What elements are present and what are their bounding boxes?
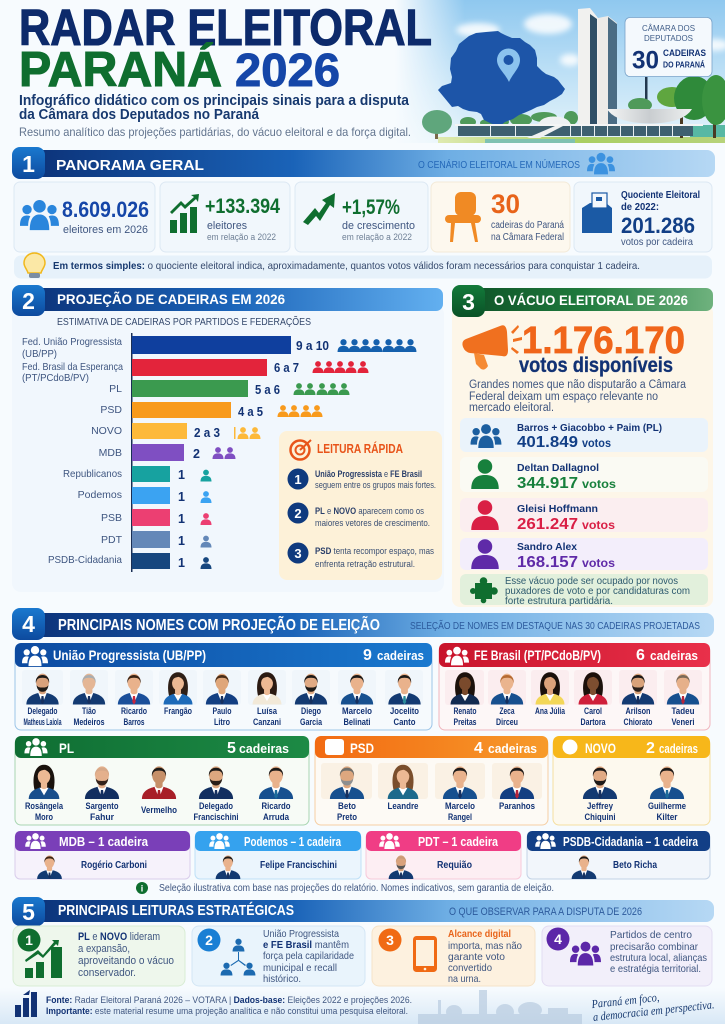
title: PARANÁ	[19, 43, 222, 97]
card: alcance digital: Alcance digital	[448, 928, 511, 940]
card: 30 cadeiras	[431, 182, 570, 252]
item 3	[288, 542, 434, 570]
section 1 heading: Panorama Geral: 1	[22, 151, 35, 177]
callout: Câmara dos Deputados: CADEIRAS	[663, 48, 706, 58]
portrait: Frangão	[164, 672, 192, 717]
row: Gleisi Hoffmann: Gleisi Hoffmann	[517, 503, 598, 515]
portrait: Beto Preto: Beto	[338, 801, 356, 812]
portrait: Ricardo Barros: Ricardo	[121, 706, 147, 717]
bar values	[178, 339, 329, 570]
card: percentual de crescimento	[295, 182, 428, 252]
bar values: 1	[178, 534, 185, 548]
portrait: Carol Dartora: Carol	[584, 706, 602, 717]
portrait: Zeca Dirceu: Dirceu	[496, 717, 518, 728]
portrait: Marcelo Rangel: Marcelo	[445, 801, 475, 812]
portrait: Jeffrey Chiquini: Jeffrey	[587, 801, 614, 812]
card: crescimento de eleitores: em relação a 2022	[207, 232, 276, 242]
bars	[132, 336, 291, 569]
portrait: Frangão: Frangão	[164, 706, 192, 717]
portrait: Delegado Matheus Laiola: Delegado	[28, 706, 58, 717]
portrait: Ricardo Barros	[118, 674, 150, 728]
portrait: Jocelito Canto: Jocelito	[390, 706, 419, 717]
bar values: 2 a 3	[194, 426, 220, 440]
portrait: Paranhos: Paranhos	[499, 801, 535, 812]
icon: torres do congresso	[578, 8, 617, 125]
icon: plenário	[607, 109, 692, 124]
card: União Progressista e FE Brasil	[192, 926, 365, 986]
panel: NOVO: NOVO	[585, 740, 616, 756]
section 1 heading: Panorama Geral: O CENÁRIO ELEITORAL EM NÚMEROS	[418, 158, 580, 171]
title: RADAR ELEITORAL	[19, 0, 432, 56]
card: alcance digital: garante voto	[448, 951, 505, 963]
card: quociente eleitoral: de 2022:	[621, 202, 659, 213]
section 3 heading: 3	[462, 289, 475, 315]
row: Barros + Giacobbo + Paim: votos	[582, 436, 611, 450]
panel: MDB	[15, 831, 190, 879]
portrait: Renato Preitas: Renato	[454, 706, 477, 717]
bar values: 4 a 5	[238, 405, 263, 419]
panel: PDT: PDT – 1 cadeira	[418, 834, 499, 849]
icon: mapa do Paraná	[438, 31, 565, 126]
bar labels: Fed. Brasil da Esperança	[22, 361, 123, 373]
panel: Podemos: Podemos – 1 cadeira	[244, 834, 342, 849]
portrait: Tião Medeiros: Medeiros	[74, 717, 104, 728]
card: crescimento de eleitores	[160, 182, 290, 252]
card: quociente eleitoral: Quociente Eleitoral	[621, 190, 700, 201]
callout: Câmara dos Deputados: DEPUTADOS	[644, 33, 693, 43]
skyline	[418, 990, 582, 1024]
bar values: 1	[178, 490, 185, 504]
section 1 heading: Panorama Geral: PANORAMA GERAL	[56, 157, 204, 174]
panel: PSDB-Cidadania	[527, 831, 710, 879]
panel: FE Brasil	[439, 643, 710, 730]
panel: União Progressista	[15, 643, 432, 730]
portrait: Arilson Chiorato	[622, 674, 654, 728]
portrait: Ricardo Arruda	[259, 766, 293, 823]
callout: vácuo pode ser ocupado: forte estrutura partidária.	[505, 596, 613, 607]
subtitle: da Câmara dos Deputados no Paraná	[19, 107, 260, 123]
icon: trees right	[657, 75, 725, 138]
portrait: Tadeu Veneri: Tadeu	[672, 706, 695, 717]
item 2: PL e NOVO aparecem como os	[315, 506, 424, 517]
item 1: seguem entre os grupos mais fortes.	[315, 480, 436, 491]
portrait: Tadeu Veneri	[667, 674, 699, 728]
subtitle: Resumo analítico das projeções partidárias, do vácuo eleitoral e da força digital.	[19, 125, 411, 139]
text block: Federal deixam um espaço relevante no	[469, 391, 658, 403]
card: 30 cadeiras: cadeiras do Paraná	[491, 220, 564, 231]
portrait: Rosângela Moro: Rosângela	[25, 801, 64, 812]
panel: cards de números	[14, 182, 712, 252]
bar labels: PDT	[101, 534, 123, 546]
section 4 heading: PRINCIPAIS NOMES COM PROJEÇÃO DE ELEIÇÃO	[58, 614, 380, 634]
card: crescimento de eleitores: +133.394	[205, 195, 280, 218]
card: partidos de centro: Partidos de centro	[610, 929, 692, 941]
card: União Progressista e FE Brasil: força pela capilaridade	[263, 950, 354, 962]
note: seleção ilustrativa: i	[141, 884, 143, 894]
portrait: Rogério Carboni: Rogério Carboni	[81, 859, 147, 871]
portrait: Jeffrey Chiquini: Chiquini	[584, 812, 616, 823]
section 2 heading: PROJEÇÃO DE CADEIRAS EM 2026	[57, 292, 285, 307]
portrait: Guilherme Kilter	[648, 766, 686, 823]
card: alcance digital	[372, 926, 535, 986]
panel: PSD: 4	[474, 740, 483, 757]
portrait: Luísa Canzani	[253, 672, 281, 728]
portrait: Sargento Fahur	[85, 766, 119, 823]
card: eleitores em 2026: eleitores em 2026	[63, 224, 148, 236]
card: percentual de crescimento: em relação a 2022	[342, 232, 412, 242]
portrait: Zeca Dirceu: Zeca	[500, 706, 515, 717]
panel: FE Brasil: cadeiras	[650, 648, 698, 663]
card: partidos de centro: estrutura local, alianças	[610, 952, 707, 964]
panel: FE Brasil: FE Brasil (PT/PCdoB/PV)	[474, 647, 601, 663]
item 2: maiores vetores de crescimento.	[315, 518, 430, 529]
portrait: Marcelo Rangel: Rangel	[448, 812, 472, 823]
icon: pole	[645, 77, 648, 107]
portrait: Zeca Dirceu	[491, 674, 523, 728]
card: percentual de crescimento: de crescimento	[342, 220, 415, 232]
row: Sandro Alex: Sandro Alex	[517, 541, 577, 553]
panel: PL: cadeiras	[239, 741, 289, 756]
panel: PDT	[366, 831, 521, 879]
portrait: Ana Júlia: Ana Júlia	[535, 706, 565, 717]
slogan	[590, 984, 715, 1024]
icon: gráfico em alta	[25, 940, 62, 978]
big number: votos disponíveis: votos disponíveis	[519, 354, 673, 377]
portrait: Leandre: Leandre	[388, 801, 418, 812]
portrait: Renato Preitas	[451, 672, 479, 728]
source text: Fonte: Radar Eleitoral Paraná 2026 – VOTARA | Dados-base: Eleições 2022 e projeções 2026.	[46, 995, 412, 1006]
portrait: Guilherme Kilter: Kilter	[656, 812, 678, 823]
card: partidos de centro	[542, 926, 712, 986]
icon: megafone	[462, 325, 522, 370]
row: Sandro Alex: votos	[582, 556, 615, 570]
bar labels	[22, 336, 123, 566]
panel: PSD	[315, 736, 548, 825]
card: alcance digital: na urna.	[448, 973, 481, 985]
portrait: Renato Preitas: Preitas	[454, 717, 476, 728]
chart subtitle: ESTIMATIVA DE CADEIRAS POR PARTIDOS E FEDERAÇÕES	[57, 315, 311, 328]
card: 30 cadeiras: na Câmara Federal	[491, 232, 564, 243]
portrait: Diego Garcia: Garcia	[300, 717, 323, 728]
card: União Progressista e FE Brasil: e FE Brasil mantêm	[263, 939, 349, 951]
callout: leitura rápida	[279, 431, 442, 580]
icon: plataforma do congresso	[455, 124, 703, 138]
panel: NOVO	[553, 736, 710, 825]
portrait: Jocelito Canto	[388, 674, 421, 728]
section 5 heading: PRINCIPAIS LEITURAS ESTRATÉGICAS	[58, 902, 294, 919]
section 4 heading: 4	[22, 611, 35, 637]
card: alcance digital: convertido	[448, 962, 492, 974]
bar labels: MDB	[99, 447, 122, 459]
portrait: Arilson Chiorato: Chiorato	[624, 717, 653, 728]
card: União Progressista e FE Brasil: municipal e recall	[263, 962, 337, 974]
bar labels: Republicanos	[63, 468, 122, 480]
portrait: Sargento Fahur: Sargento	[86, 801, 119, 812]
portrait: Beto Preto	[330, 766, 364, 823]
portrait: Felipe Francischini	[216, 855, 337, 879]
portrait: Delegado Matheus Laiola: Matheus Laiola	[24, 717, 62, 728]
panel: PL: PL	[59, 740, 74, 756]
icon: rede de pessoas	[221, 939, 255, 976]
header illustration: Congresso Nacional e mapa do Paraná	[395, 0, 725, 143]
portrait: Delegado Francischini: Delegado	[199, 801, 233, 812]
portrait: Beto Richa: Beto Richa	[613, 859, 657, 871]
portrait: Beto Preto: Preto	[337, 812, 357, 823]
card: quociente eleitoral: votos por cadeira	[621, 236, 693, 248]
portrait: Arilson Chiorato: Arilson	[626, 706, 651, 717]
card: alcance digital: 3	[386, 932, 394, 948]
portrait: Luísa Canzani: Luísa	[257, 706, 278, 717]
callout: em termos simples: Em termos simples: o quociente eleitoral indica, aproximadamente, quantos votos válidos foram necessários para conquistar 1 cadeira.	[53, 260, 640, 272]
row: Deltan Dallagnol: votos	[582, 477, 616, 491]
panel: PSD: cadeiras	[488, 741, 537, 756]
portrait: Guilherme Kilter: Guilherme	[648, 801, 686, 812]
portrait: Diego Garcia: Diego	[301, 706, 321, 717]
bar labels: (UB/PP)	[22, 348, 57, 360]
portrait: Tião Medeiros: Tião	[82, 706, 96, 717]
bar values: 1	[178, 512, 185, 526]
card: PL e NOVO: aproveitando o vácuo	[78, 955, 174, 967]
panel: NOVO: cadeiras	[659, 741, 698, 756]
row: Barros + Giacobbo + Paim: Barros + Giacobbo + Paim (PL)	[517, 422, 662, 434]
portrait: Ana Júlia	[535, 672, 565, 717]
card: alcance digital: importa, mas não	[448, 940, 522, 952]
portrait: Sargento Fahur: Fahur	[90, 812, 114, 823]
row: Deltan Dallagnol: Deltan Dallagnol	[517, 462, 599, 474]
portrait: Requião	[389, 855, 472, 879]
icon: lâmpada	[24, 253, 45, 278]
item 1: União Progressista e FE Brasil	[315, 469, 422, 480]
callout: Câmara dos Deputados	[625, 18, 712, 76]
card: quociente eleitoral	[574, 182, 712, 252]
card: União Progressista e FE Brasil: União Progressista	[263, 928, 339, 940]
bar values: 2	[193, 447, 200, 461]
portrait: Marcelo Belinati	[341, 674, 373, 728]
portrait: Tadeu Veneri: Veneri	[672, 717, 694, 728]
panel: PSD: PSD	[350, 740, 374, 756]
portrait: Paulo Litro: Paulo	[212, 706, 232, 717]
panel: FE Brasil: 6	[636, 647, 645, 664]
portrait: Carol Dartora	[579, 672, 607, 728]
card: partidos de centro: e estratégia territorial.	[610, 963, 701, 975]
bar values: 6 a 7	[274, 361, 299, 375]
panel: NOVO: 2	[646, 740, 655, 757]
bar labels: PSB	[101, 512, 122, 524]
subtitle	[19, 93, 411, 139]
portrait: Ricardo Barros: Barros	[124, 717, 144, 728]
bar chart	[22, 333, 416, 572]
bar values: 1	[178, 468, 185, 482]
panel: União Progressista: União Progressista (UB/PP)	[53, 647, 206, 663]
bar labels: Podemos	[78, 489, 122, 501]
card: PL e NOVO: conservador.	[78, 967, 136, 979]
bar labels: Fed. União Progressista	[22, 336, 122, 348]
portrait: Vermelho	[141, 766, 177, 816]
card: eleitores em 2026	[14, 182, 155, 252]
panel: União Progressista: 9	[363, 647, 372, 664]
card: crescimento de eleitores: eleitores	[207, 220, 247, 232]
bar values: 9 a 10	[296, 339, 329, 353]
callout: vácuo pode ser ocupado: Esse vácuo pode ser ocupado por novos	[505, 576, 678, 587]
item 1: 1	[294, 472, 302, 487]
text block: Grandes nomes que não disputarão a Câmara	[469, 379, 687, 391]
title: 2026	[235, 44, 340, 96]
item 3: 3	[294, 546, 302, 561]
row: Deltan Dallagnol: 344.917	[517, 475, 578, 492]
portrait: Delegado Francischini: Francischini	[194, 812, 238, 823]
card: PL e NOVO: PL e NOVO lideram	[78, 931, 160, 943]
portrait: Paulo Litro: Litro	[214, 717, 230, 728]
portrait: Marcelo Rangel	[443, 766, 477, 823]
item 2	[288, 502, 430, 529]
section 4 heading	[12, 608, 714, 640]
portrait: Marcelo Belinati: Belinati	[344, 717, 370, 728]
icon: trees left	[422, 110, 452, 139]
callout: vácuo pode ser ocupado	[460, 574, 708, 607]
bar values: 5 a 6	[255, 383, 280, 397]
row: Gleisi Hoffmann: votos	[582, 518, 615, 532]
big number: votos disponíveis: 1.176.170	[522, 320, 685, 362]
callout: Câmara dos Deputados: DO PARANÁ	[663, 60, 705, 70]
row: Deltan Dallagnol	[460, 457, 708, 492]
card: eleitores em 2026: 8.609.026	[62, 197, 149, 222]
portrait: Delegado Matheus Laiola	[24, 674, 62, 728]
row: Gleisi Hoffmann: 261.247	[517, 516, 578, 533]
item 3: PSD tenta recompor espaço, mas	[315, 546, 434, 557]
section 3 heading	[452, 285, 713, 317]
portrait: Vermelho: Vermelho	[141, 805, 177, 816]
portrait: Tião Medeiros	[73, 674, 105, 728]
section 5 heading: 5	[22, 899, 35, 925]
portrait: Jeffrey Chiquini	[583, 766, 617, 823]
slogan: Paraná em foco,	[590, 990, 660, 1011]
row: Sandro Alex: 168.157	[517, 554, 578, 571]
card: percentual de crescimento: +1,57%	[342, 196, 400, 219]
card: quociente eleitoral: 201.286	[621, 213, 695, 238]
footer	[0, 984, 725, 1024]
section 5 heading: O QUE OBSERVAR PARA A DISPUTA DE 2026	[449, 906, 642, 918]
bar labels: NOVO	[91, 425, 122, 437]
portrait: Ricardo Arruda: Ricardo	[262, 801, 291, 812]
portrait: Paranhos	[499, 766, 535, 812]
row: Barros + Giacobbo + Paim: 401.849	[517, 434, 578, 451]
card: PL e NOVO: 1	[25, 932, 33, 948]
portrait: Diego Garcia	[295, 674, 327, 728]
icon: cúpula menor	[538, 116, 571, 125]
portrait: Paulo Litro	[206, 674, 238, 728]
card: partidos de centro: 4	[554, 931, 562, 947]
bar labels: PL	[109, 383, 122, 395]
portrait: Rosângela Moro	[25, 765, 64, 823]
panel: Podemos	[195, 831, 361, 879]
row: Sandro Alex	[460, 538, 708, 571]
section 2 heading: 2	[22, 288, 35, 314]
portrait: Leandre	[388, 765, 418, 812]
portrait: Luísa Canzani: Canzani	[253, 717, 281, 728]
portrait: Rosângela Moro: Moro	[35, 812, 53, 823]
card: PL e NOVO: a expansão,	[78, 943, 130, 955]
portrait: Rogério Carboni	[37, 855, 147, 879]
note: seleção ilustrativa: Seleção ilustrativa com base nas projeções do relatório. Nomes indicativos, sem garantia de eleição.	[159, 883, 554, 894]
callout: leitura rápida: LEITURA RÁPIDA	[317, 441, 403, 456]
section 2 heading	[12, 285, 443, 316]
callout: Câmara dos Deputados: CÂMARA DOS	[642, 23, 695, 33]
icon: marcador no mapa	[497, 49, 520, 82]
section 3 heading: O VÁCUO ELEITORAL DE 2026	[494, 293, 688, 308]
panel: MDB: MDB – 1 cadeira	[59, 834, 149, 849]
footer: Importante: este material resume uma projeção analítica e não constitui uma pesquisa eleitoral.	[46, 1006, 408, 1017]
panel: União Progressista: cadeiras	[377, 648, 424, 663]
item 2: 2	[294, 506, 302, 521]
text block	[469, 379, 687, 414]
row: Gleisi Hoffmann	[460, 498, 708, 533]
portrait: Delegado Francischini	[194, 766, 238, 823]
section 5 heading	[12, 897, 714, 926]
icon: celular	[413, 936, 437, 972]
panel: PL: 5	[227, 740, 236, 757]
portrait: Carol Dartora: Dartora	[580, 717, 606, 728]
portrait: Beto Richa	[572, 855, 657, 879]
card: 30 cadeiras: 30	[491, 189, 520, 219]
portrait: Requião: Requião	[437, 859, 472, 871]
icon: quebra-cabeça	[470, 577, 498, 603]
row: Barros + Giacobbo + Paim	[460, 418, 708, 452]
item 3: enfrenta retração estrutural.	[315, 559, 415, 570]
card: PL e NOVO	[13, 926, 185, 986]
portrait: Marcelo Belinati: Marcelo	[342, 706, 372, 717]
text block: mercado eleitoral.	[469, 402, 554, 414]
bar labels: PSDB-Cidadania	[48, 554, 122, 566]
item 1	[288, 468, 436, 491]
panel: o vácuo eleitoral	[452, 285, 713, 607]
card: partidos de centro: precisarão combinar	[610, 941, 698, 953]
panel: projeção de cadeiras	[12, 285, 444, 592]
portrait: Ricardo Arruda: Arruda	[263, 812, 290, 823]
bar labels: PSD	[100, 404, 122, 416]
bar values: 1	[178, 556, 185, 570]
callout: em termos simples	[14, 253, 712, 278]
title	[19, 0, 432, 97]
portrait: Jocelito Canto: Canto	[394, 717, 416, 728]
portrait: Felipe Francischini: Felipe Francischini	[260, 859, 337, 871]
section 1 heading: Panorama Geral	[12, 147, 715, 179]
panel: PL	[15, 736, 309, 825]
bar labels: (PT/PCdoB/PV)	[22, 372, 89, 384]
callout: vácuo pode ser ocupado: puxadores de voto e por candidaturas com	[505, 586, 690, 597]
card: União Progressista e FE Brasil: histórico.	[263, 973, 301, 985]
callout: Câmara dos Deputados: 30	[632, 46, 659, 74]
icon: alvo	[290, 440, 311, 460]
subtitle: Infográfico didático com os principais sinais para a disputa	[19, 93, 410, 109]
card: União Progressista e FE Brasil: 2	[205, 932, 213, 948]
pictogram: cadeiras por partido	[200, 339, 416, 569]
icon: logo VOTARA	[15, 990, 37, 1017]
